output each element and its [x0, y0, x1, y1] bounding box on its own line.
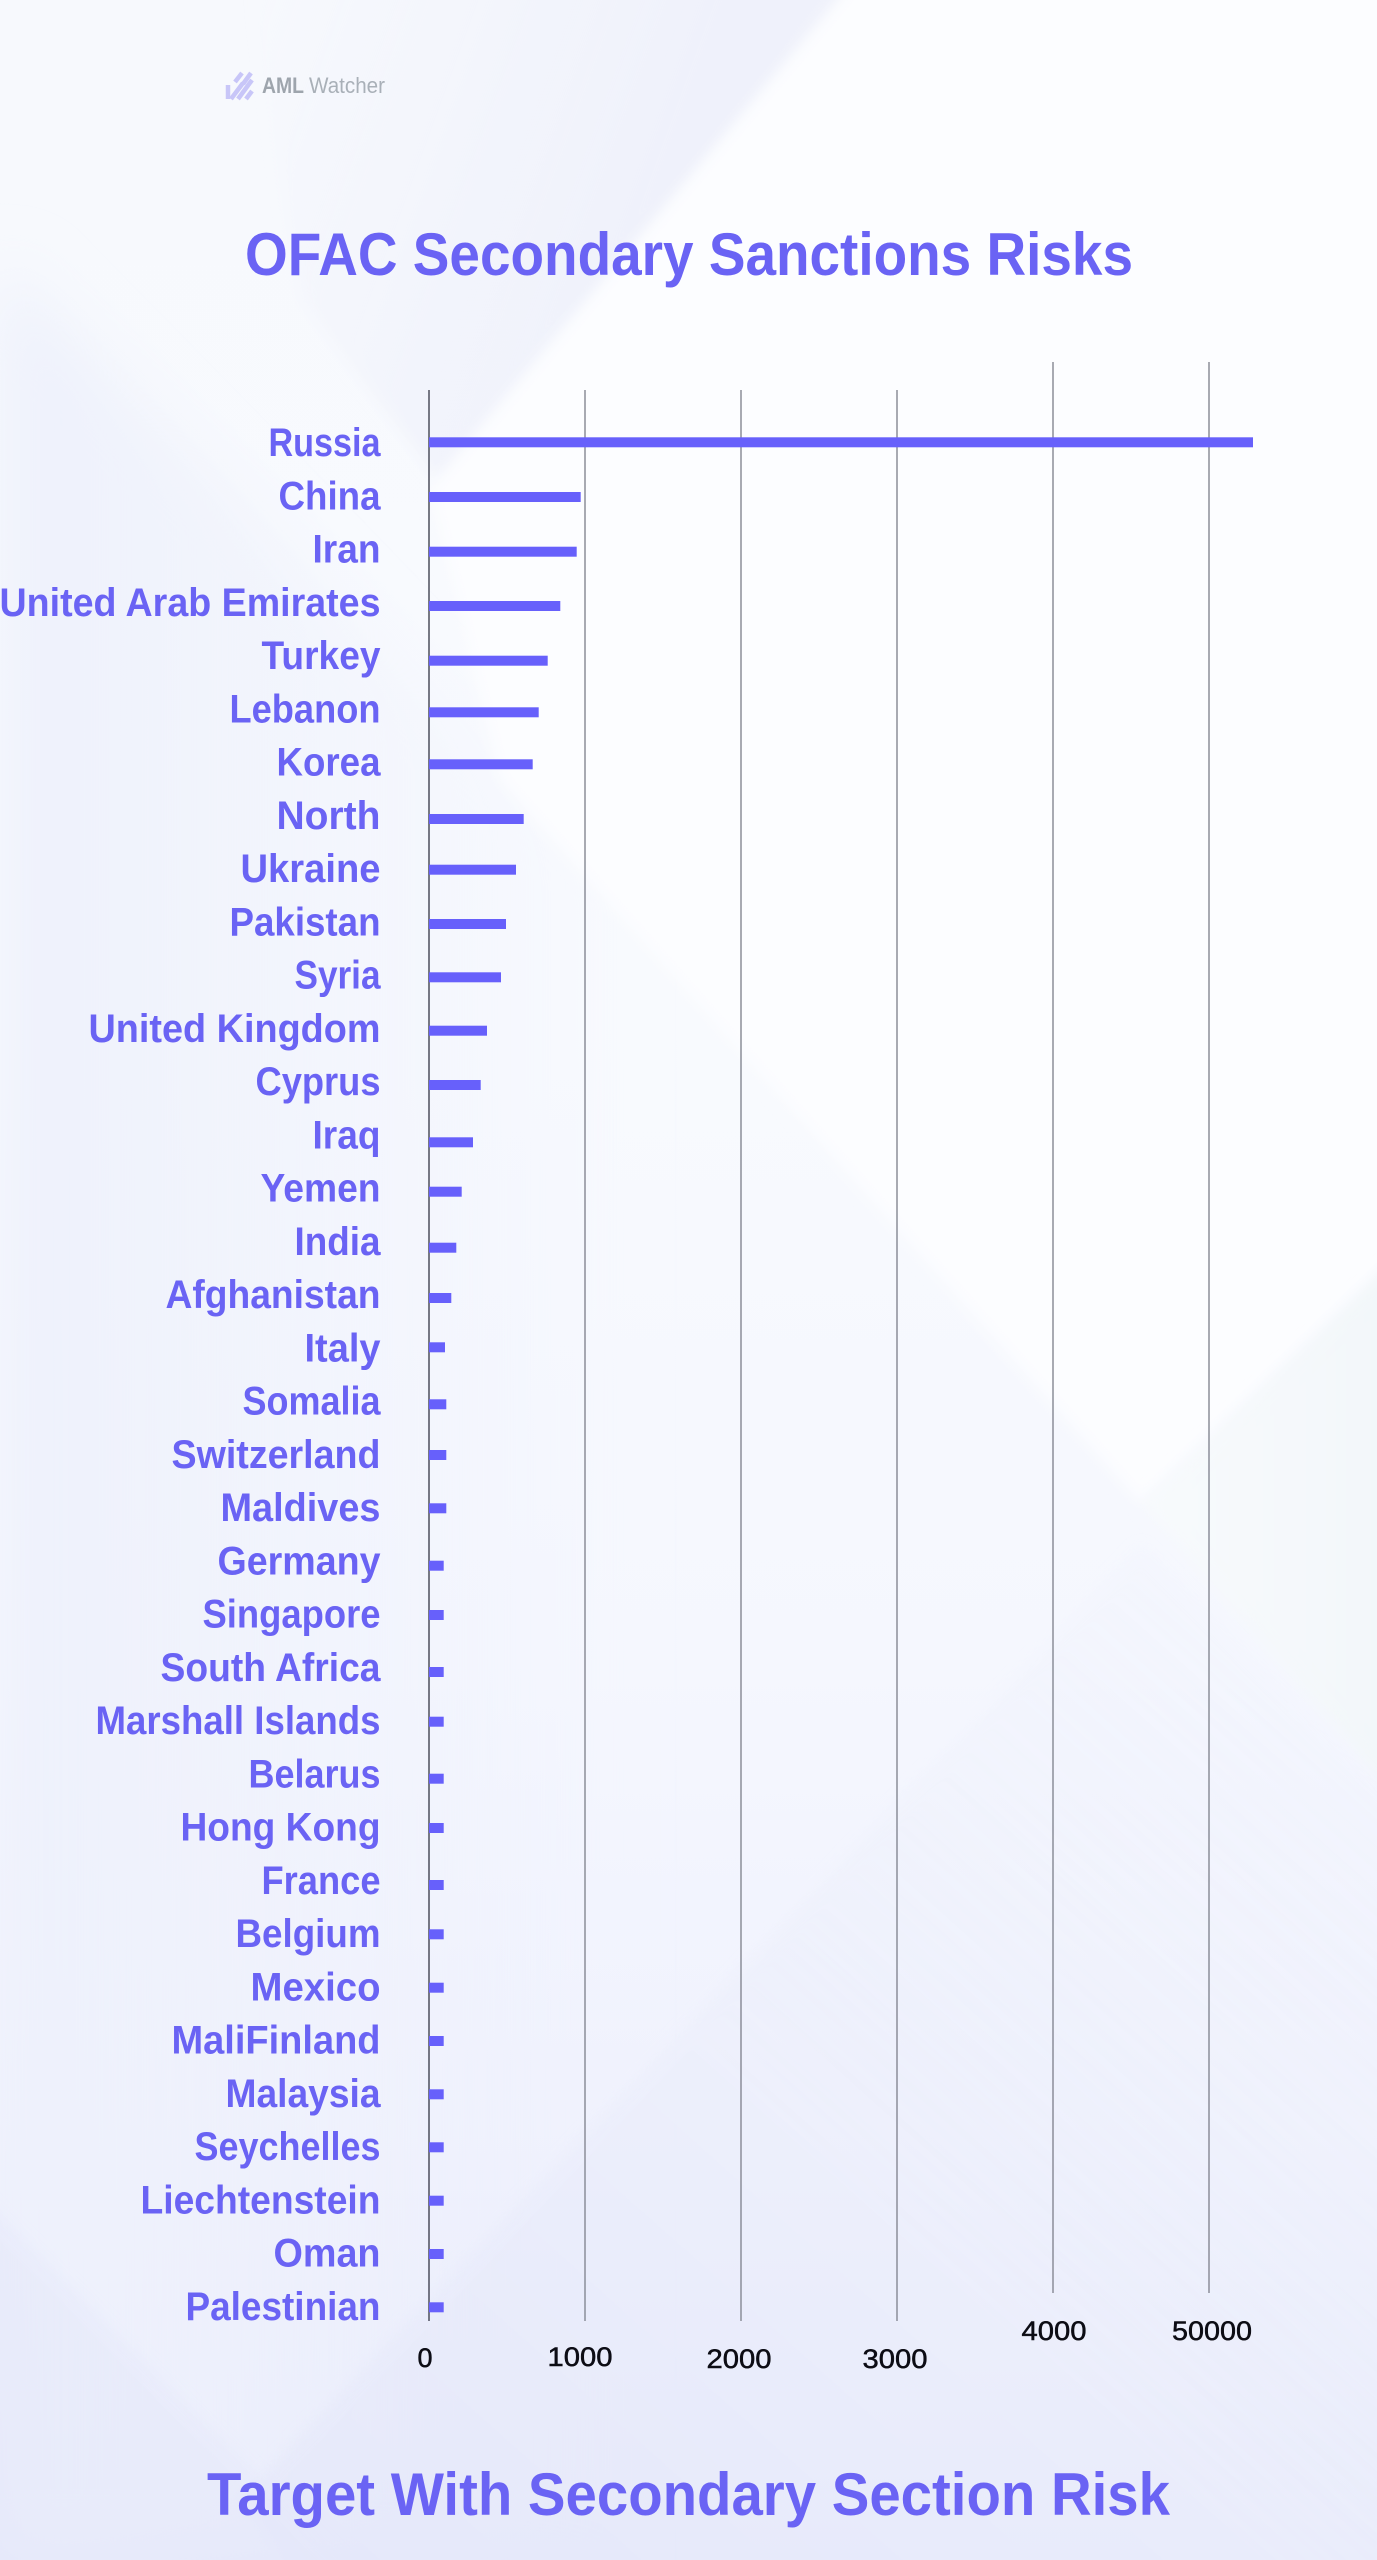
country labels: Lebanon: [230, 687, 380, 731]
country labels: India: [294, 1220, 381, 1264]
x-axis tick labels: 4000: [1022, 2316, 1086, 2346]
icon: striped logo mark: [228, 73, 252, 99]
country labels: Iran: [312, 528, 380, 572]
grid lines and axis: [429, 362, 1209, 2321]
country labels: Maldives: [220, 1486, 380, 1530]
country labels: Singapore: [202, 1592, 380, 1636]
footer heading: Target With Secondary Section Risk: [207, 2461, 1171, 2528]
x-axis tick labels: 0: [417, 2343, 433, 2373]
country labels: Germany: [218, 1539, 381, 1583]
x-axis tick labels: 3000: [862, 2344, 928, 2374]
country labels: [0, 421, 381, 2329]
country labels: Turkey: [262, 634, 381, 678]
country labels: Yemen: [260, 1166, 380, 1210]
country labels: China: [278, 474, 381, 518]
x-axis tick labels: [417, 2316, 1252, 2374]
country labels: Afghanistan: [166, 1273, 380, 1317]
country labels: Somalia: [242, 1380, 381, 1424]
country labels: Malaysia: [226, 2072, 381, 2116]
country labels: Russia: [268, 421, 381, 465]
country labels: Oman: [274, 2232, 380, 2276]
country labels: France: [262, 1859, 380, 1903]
country labels: MaliFinland: [172, 2018, 380, 2062]
x-axis tick labels: 50000: [1172, 2316, 1252, 2346]
chart: horizontal bar chart: [0, 362, 1253, 2374]
logo: AML Watcher: [228, 73, 385, 99]
x-axis tick labels: 1000: [548, 2342, 612, 2372]
logo: AML Watcher: Watcher: [309, 73, 385, 98]
country labels: Hong Kong: [180, 1806, 380, 1850]
country labels: United Kingdom: [88, 1007, 380, 1051]
country labels: United Arab Emirates: [0, 581, 380, 625]
country labels: Syria: [294, 954, 381, 998]
country labels: Liechtenstein: [140, 2178, 380, 2222]
country labels: Korea: [276, 740, 381, 784]
country labels: Switzerland: [172, 1433, 380, 1477]
country labels: Pakistan: [230, 900, 380, 944]
x-axis tick labels: 2000: [706, 2344, 772, 2374]
country labels: Marshall Islands: [96, 1699, 380, 1743]
country labels: Iraq: [312, 1113, 380, 1157]
bars: [429, 437, 1253, 2312]
country labels: Palestinian: [186, 2285, 380, 2329]
country labels: Belarus: [248, 1752, 380, 1796]
country labels: North: [276, 794, 380, 838]
country labels: Seychelles: [194, 2125, 380, 2169]
title: OFAC Secondary Sanctions Risks: [245, 221, 1133, 288]
country labels: Italy: [304, 1326, 381, 1370]
country labels: Belgium: [236, 1912, 380, 1956]
country labels: Cyprus: [256, 1060, 380, 1104]
country labels: South Africa: [160, 1646, 381, 1690]
logo wordmark: AML: [262, 73, 304, 98]
country labels: Mexico: [250, 1965, 380, 2009]
country labels: Ukraine: [240, 847, 380, 891]
